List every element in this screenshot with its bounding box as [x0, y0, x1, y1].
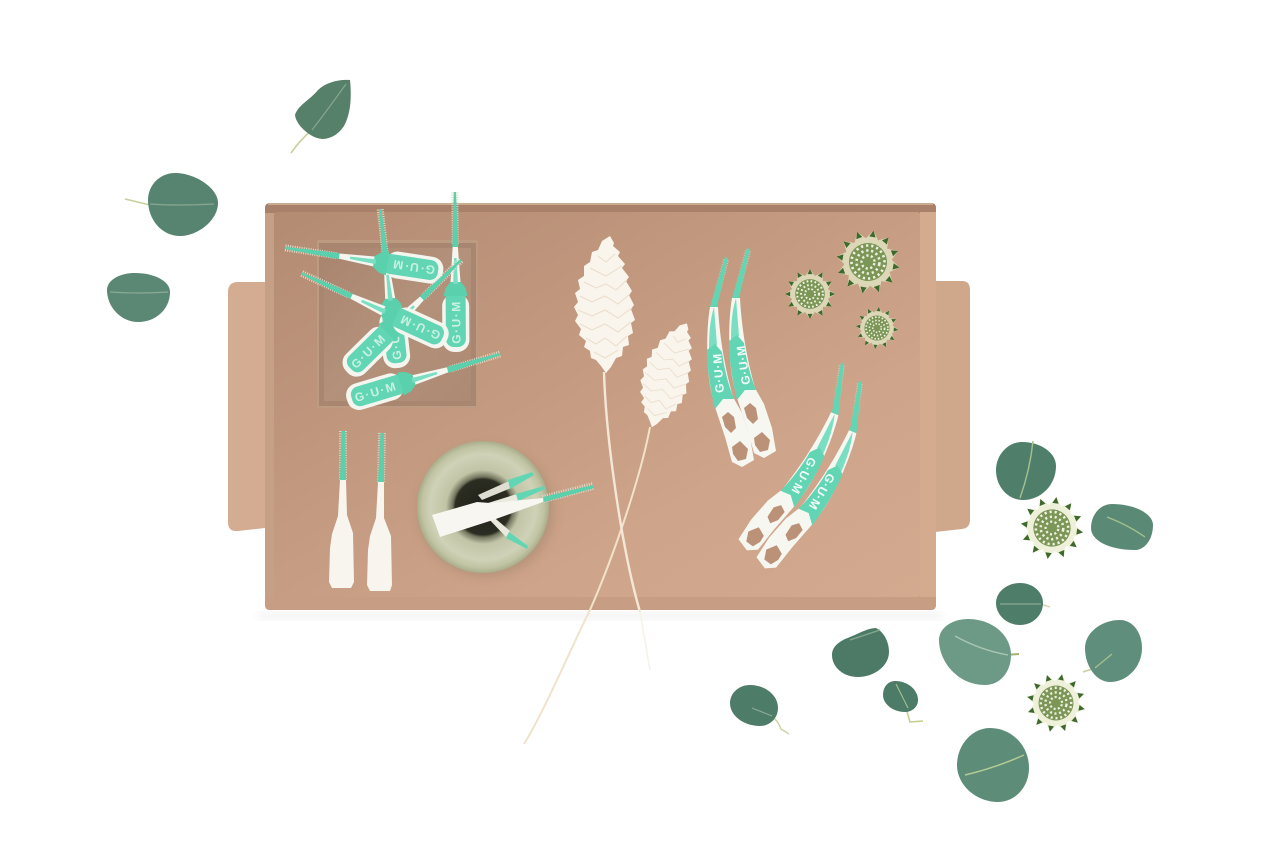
tray floor — [274, 212, 920, 597]
curved pick — [729, 248, 776, 458]
flowers on background — [1017, 493, 1091, 738]
leaf right 1 — [996, 441, 1056, 500]
pick: top left: G·U·M — [391, 257, 436, 277]
leaf bottom 2 large — [939, 619, 1019, 685]
flower — [785, 269, 835, 319]
curved picks upper pair — [707, 248, 776, 467]
pick: upright right: G·U·M — [449, 300, 463, 344]
white soft picks left — [329, 431, 392, 591]
flower — [831, 225, 905, 299]
large plume — [574, 236, 635, 373]
pick: under — [367, 207, 411, 370]
pick: diagonal falling — [296, 261, 453, 352]
picks inside bowl — [432, 472, 594, 549]
leaf bottom 5 — [883, 681, 923, 722]
tray body — [265, 203, 936, 610]
curved pick: G·U·M — [788, 455, 819, 497]
leaf top left — [291, 80, 351, 153]
dried plumes — [524, 236, 706, 744]
leaf bottom 4 — [730, 685, 789, 734]
tray — [228, 203, 970, 620]
white pick 1 — [329, 431, 354, 588]
curved pick: G·U·M — [806, 471, 838, 513]
leaf bottom 6 large — [957, 728, 1029, 802]
curved pick — [754, 370, 879, 582]
curved pick — [707, 257, 754, 467]
flower — [854, 305, 900, 351]
curved pick: G·U·M — [710, 353, 727, 393]
pick: diagonal rising — [338, 250, 471, 382]
small plume — [627, 315, 706, 434]
pick: bottom: G·U·M — [353, 379, 399, 405]
pick: diagonal falling: G·U·M — [397, 312, 443, 342]
white pick 2 — [367, 433, 392, 591]
tray handle left — [228, 282, 265, 531]
flower — [1021, 668, 1091, 738]
tray handle right — [935, 281, 970, 532]
curved picks lower pair — [736, 352, 879, 582]
pick: under: G·U·M — [386, 316, 405, 361]
pick: diagonal rising: G·U·M — [348, 331, 389, 372]
pick: bottom — [343, 341, 504, 413]
flower — [1017, 493, 1087, 563]
bowl with picks — [417, 441, 594, 577]
small square dish — [317, 240, 478, 408]
leaf bottom 1 — [832, 628, 889, 677]
leaf bottom 3 — [1083, 620, 1142, 682]
curved pick: G·U·M — [734, 344, 753, 386]
leaf right 2 — [1091, 504, 1153, 550]
curved pick — [736, 352, 861, 564]
leaf left lower — [107, 273, 170, 322]
leaf right 3 — [996, 583, 1050, 625]
picks with GUM handles in dish — [283, 192, 504, 413]
eucalyptus leaves — [107, 80, 1153, 802]
pick: upright right — [441, 192, 469, 352]
pick: top left — [283, 234, 445, 285]
leaf left — [125, 173, 218, 236]
flowers on tray — [785, 225, 905, 351]
plume stems — [524, 427, 650, 744]
